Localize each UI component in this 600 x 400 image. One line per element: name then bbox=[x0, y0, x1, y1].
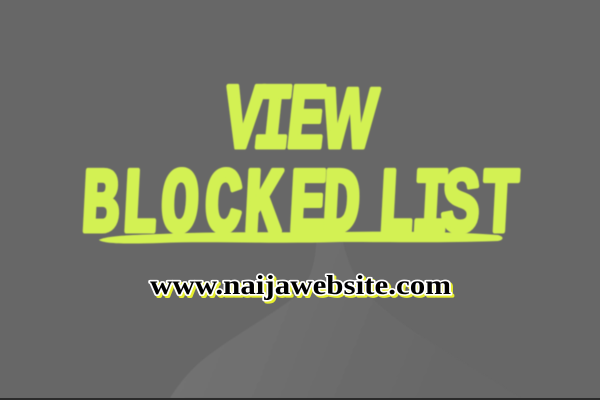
faded figure silhouette bbox=[170, 225, 520, 398]
website address: www.naijawebsite.com bbox=[150, 270, 452, 300]
title line: BLOCKED LIST: BLOCKED LIST bbox=[79, 154, 522, 259]
brush underline bbox=[99, 232, 503, 244]
bottom edge strip bbox=[0, 398, 600, 400]
title line: VIEW: VIEW bbox=[219, 70, 382, 175]
title bbox=[79, 70, 522, 259]
